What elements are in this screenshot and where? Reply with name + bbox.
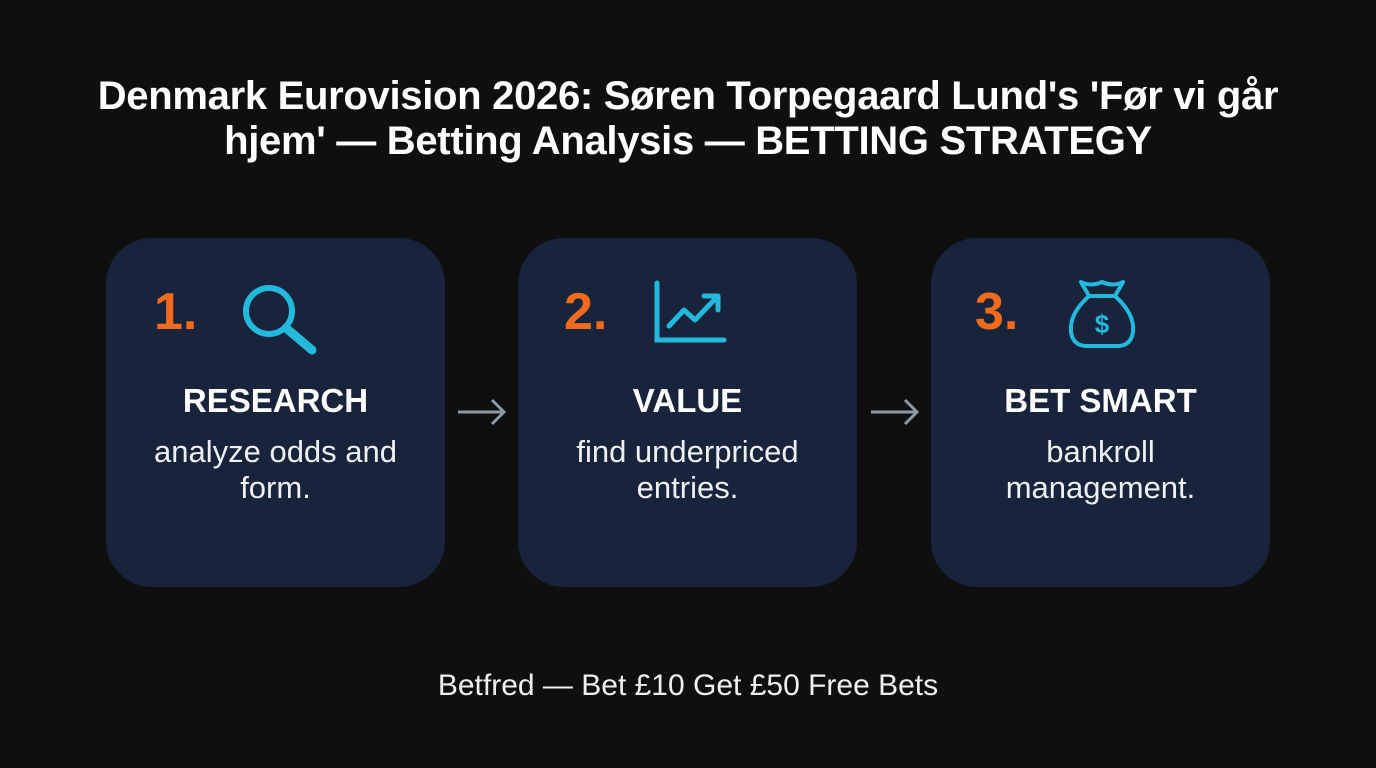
body: entries. xyxy=(637,470,738,505)
icon: money bag xyxy=(1068,280,1136,348)
body: management. xyxy=(1006,470,1195,505)
icon: chart xyxy=(654,280,726,342)
number 2: 2. xyxy=(564,283,607,341)
panel: value xyxy=(518,238,857,587)
arrow 2 xyxy=(871,399,919,425)
arrow 1 xyxy=(458,399,506,425)
heading: VALUE xyxy=(633,382,742,419)
body: bankroll xyxy=(1046,434,1155,469)
title: hjem' — Betting Analysis — BETTING STRATEGY xyxy=(224,119,1152,163)
body: analyze odds and xyxy=(154,434,397,469)
icon: magnifier xyxy=(243,285,316,354)
body xyxy=(576,434,799,505)
body xyxy=(154,434,397,505)
footer: Betfred — Bet £10 Get £50 Free Bets xyxy=(438,669,938,702)
heading: RESEARCH xyxy=(183,382,368,419)
panel: bet smart xyxy=(931,238,1270,587)
title xyxy=(98,74,1278,163)
icon: money bag: $ xyxy=(1095,309,1110,339)
body: form. xyxy=(240,470,311,505)
panel: research xyxy=(106,238,445,587)
heading: BET SMART xyxy=(1004,382,1197,419)
body: find underpriced xyxy=(576,434,799,469)
body xyxy=(1006,434,1195,505)
number 1: 1. xyxy=(154,283,197,341)
number 3: 3. xyxy=(975,283,1018,341)
title: Denmark Eurovision 2026: Søren Torpegaard Lund's 'Før vi går xyxy=(98,74,1278,118)
